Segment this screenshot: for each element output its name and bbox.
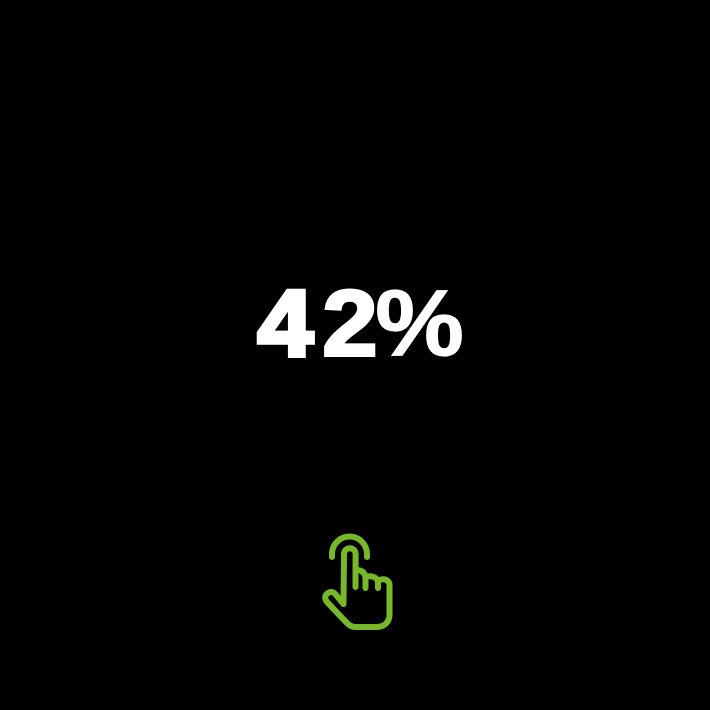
- heading: 42 percent statistic: 4: [258, 270, 313, 376]
- icon: tapping hand: [325, 536, 390, 627]
- heading: 42 percent statistic: %: [375, 270, 464, 376]
- heading: 42 percent statistic: 2: [322, 270, 378, 376]
